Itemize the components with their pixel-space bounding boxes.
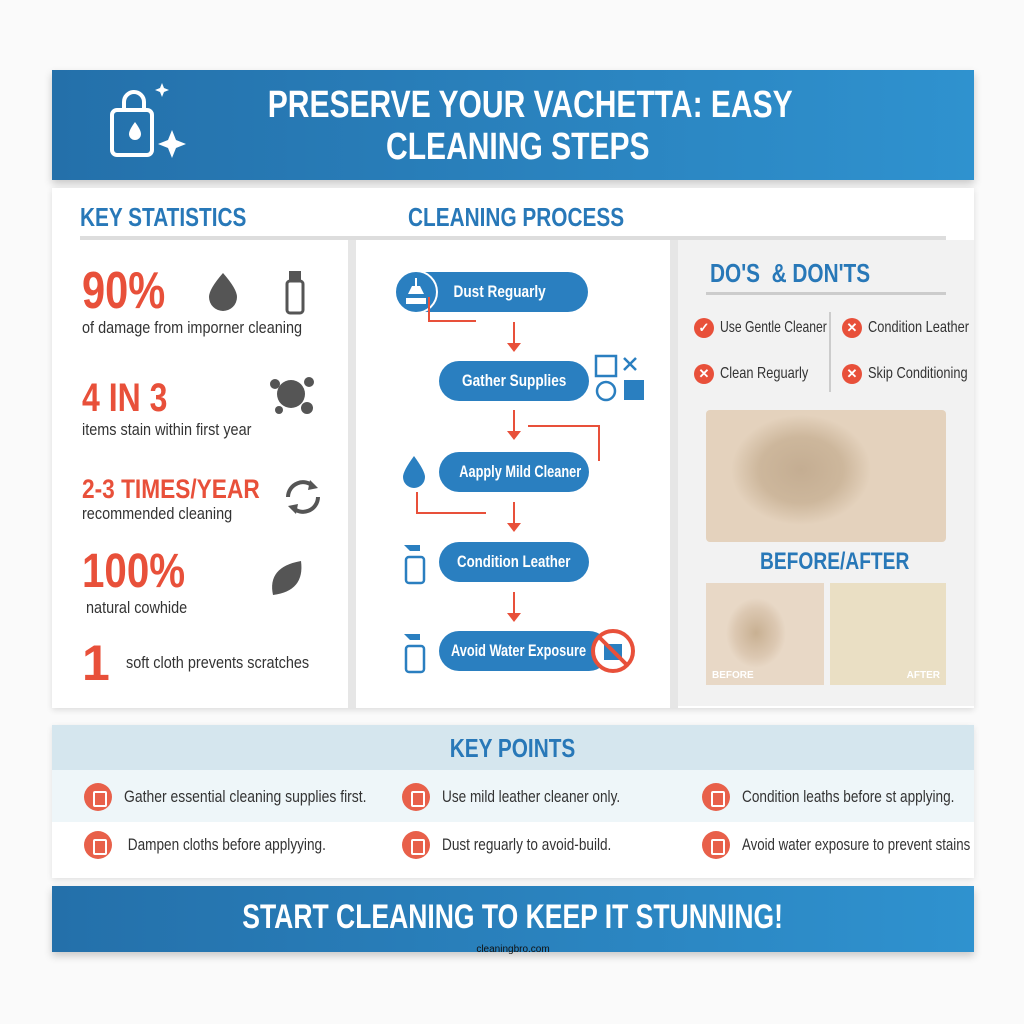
watermark: cleaningbro.com — [476, 944, 550, 955]
step: avoid water exposure — [439, 631, 609, 671]
title: CLEANING STEPS — [386, 126, 650, 168]
point 5: Dust reguarly to avoid-build. — [442, 835, 611, 854]
step: dust regularly: Dust Reguarly — [454, 282, 546, 301]
heading: key points: KEY POINTS — [450, 733, 576, 763]
point 3 — [702, 783, 954, 811]
title: PRESERVE YOUR VACHETTA: EASY — [268, 84, 793, 126]
heading: key statistics: KEY STATISTICS — [80, 202, 246, 232]
do: clean regularly — [694, 364, 808, 384]
step: gather supplies: Gather Supplies — [462, 371, 566, 390]
panel: key points — [52, 725, 974, 878]
panel: key statistics — [82, 262, 320, 691]
point 4: Dampen cloths before applyying. — [128, 835, 326, 854]
footer text: START CLEANING TO KEEP IT STUNNING! — [243, 898, 783, 936]
dont: condition leather: ✕ — [847, 320, 857, 335]
image: before: BEFORE — [712, 670, 754, 681]
footer banner — [52, 886, 974, 952]
point 2: Use mild leather cleaner only. — [442, 787, 620, 806]
icon: leaf — [272, 561, 302, 595]
stat 100%: 100% — [82, 545, 185, 598]
arrow 1 — [513, 322, 515, 344]
image: before — [706, 583, 824, 685]
stat 100%: natural cowhide — [86, 598, 187, 617]
step: avoid water exposure: Avoid Water Exposure — [451, 641, 586, 660]
stat 1 soft cloth: 1 — [82, 635, 110, 691]
header banner — [52, 70, 974, 180]
panel: dos and donts — [678, 240, 974, 706]
do: gentle cleaner: ✓ — [699, 320, 709, 335]
dont: skip conditioning: ✕ — [847, 366, 857, 381]
point 1: Gather essential cleaning supplies first. — [124, 787, 367, 806]
point 2 — [402, 783, 620, 811]
step: gather supplies — [439, 361, 589, 401]
icon: refresh — [286, 480, 320, 514]
dont: condition leather — [842, 318, 969, 338]
do: gentle cleaner — [694, 318, 827, 338]
panel: cleaning process flow — [396, 272, 644, 674]
stat 2-3 times/year — [82, 474, 260, 523]
icon: splat — [270, 377, 314, 414]
stat 1 soft cloth — [82, 635, 309, 691]
point 3: Condition leaths before st applying. — [742, 787, 954, 806]
dont: skip conditioning: Skip Conditioning — [868, 365, 968, 382]
stat 4 in 3: items stain within first year — [82, 420, 251, 439]
stat 2-3 times/year: 2-3 TIMES/YEAR — [82, 474, 260, 504]
stat 90%: 90% — [82, 262, 165, 320]
image: stained leather — [706, 410, 946, 542]
point 4 — [84, 831, 326, 859]
heading: dos & donts: DO'S & DON'TS — [710, 258, 870, 288]
heading: cleaning process: CLEANING PROCESS — [408, 202, 624, 232]
arrow 4 — [513, 592, 515, 614]
icon: bag with drop — [110, 83, 186, 158]
stat 2-3 times/year: recommended cleaning — [82, 504, 232, 523]
dont: condition leather: Condition Leather — [868, 319, 969, 336]
point 6: Avoid water exposure to prevent stains — [742, 835, 970, 854]
do: clean regularly: ✕ — [699, 366, 709, 381]
icon: brush — [396, 272, 438, 312]
step: dust regularly — [398, 272, 588, 312]
do: gentle cleaner: Use Gentle Cleaner — [720, 319, 827, 336]
do: clean regularly: Clean Reguarly — [720, 365, 808, 382]
main panel — [52, 188, 974, 708]
stat 90%: of damage from imporner cleaning — [82, 318, 302, 337]
step: apply mild cleaner — [439, 452, 589, 492]
icon: spray bottle 2 — [404, 634, 426, 674]
title — [268, 84, 793, 168]
point 5 — [402, 831, 611, 859]
heading: before/after: BEFORE/AFTER — [760, 548, 909, 575]
step: condition leather: Condition Leather — [457, 552, 571, 571]
icon: drop and bottle — [209, 271, 304, 314]
icon: spray bottle — [404, 545, 426, 584]
step: condition leather — [439, 542, 589, 582]
image: after: AFTER — [907, 670, 940, 681]
stat 1 soft cloth: soft cloth prevents scratches — [126, 653, 309, 672]
stat 4 in 3 — [82, 376, 252, 439]
stat 4 in 3: 4 IN 3 — [82, 376, 167, 420]
point 1 — [84, 783, 367, 811]
arrow 3 — [513, 502, 515, 524]
dont: skip conditioning — [842, 364, 968, 384]
icon: supplies group — [594, 354, 644, 402]
icon: drop — [403, 456, 425, 488]
point 6 — [702, 831, 970, 859]
step: apply mild cleaner: Aapply Mild Cleaner — [459, 462, 581, 481]
arrow 2 — [513, 410, 515, 432]
image: after — [830, 583, 946, 685]
icon: no water — [591, 629, 635, 673]
stat 90% — [82, 262, 302, 337]
